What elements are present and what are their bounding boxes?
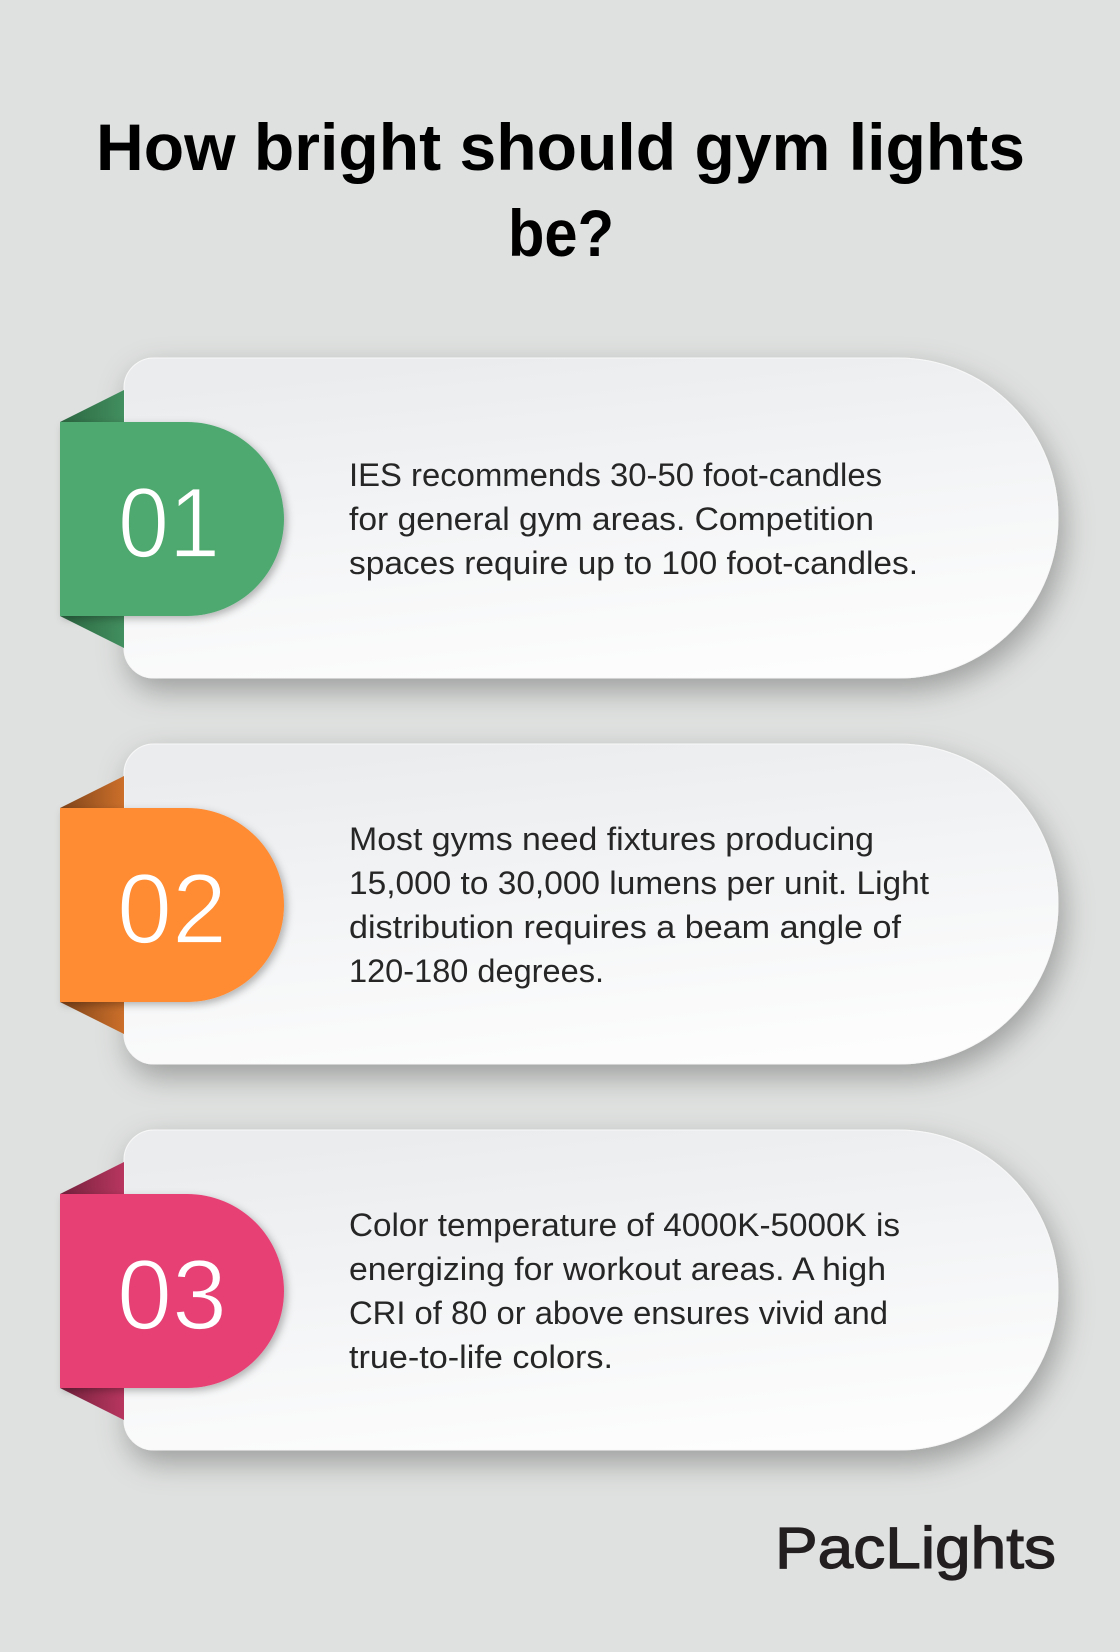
- text 02: 15,000 to 30,000 lumens per unit. Light: [349, 865, 929, 901]
- text 03: Color temperature of 4000K-5000K is: [349, 1207, 900, 1243]
- text 01: [349, 457, 918, 581]
- text 01: spaces require up to 100 foot-candles.: [349, 545, 918, 581]
- text 02: distribution requires a beam angle of: [349, 909, 901, 945]
- ribbon folds 01: [60, 390, 124, 648]
- number 01: 01: [118, 467, 220, 578]
- text 02: 120-180 degrees.: [349, 953, 604, 989]
- text 03: [349, 1207, 900, 1375]
- card 02: [124, 744, 1058, 1064]
- text 03: energizing for workout areas. A high: [349, 1251, 886, 1287]
- ribbon folds 03: [60, 1162, 124, 1420]
- title: be?: [508, 196, 614, 270]
- number 03: 03: [117, 1239, 227, 1350]
- text 01: IES recommends 30-50 foot-candles: [349, 457, 882, 493]
- text 01: for general gym areas. Competition: [349, 501, 874, 537]
- ribbon folds 02: [60, 776, 124, 1034]
- text 02: Most gyms need fixtures producing: [349, 821, 874, 857]
- text 03: true-to-life colors.: [349, 1339, 613, 1375]
- title: How bright should gym lights: [96, 110, 1025, 184]
- panel: step 01: [60, 358, 1058, 678]
- number badge 03: [60, 1194, 284, 1388]
- text 03: CRI of 80 or above ensures vivid and: [349, 1295, 888, 1331]
- panel: step 02: [60, 744, 1058, 1064]
- number badge 02: [60, 808, 284, 1002]
- number 02: 02: [117, 853, 227, 964]
- card 01: [124, 358, 1058, 678]
- panel: step 03: [60, 1130, 1058, 1450]
- card 03: [124, 1130, 1058, 1450]
- number badge 01: [60, 422, 284, 616]
- text 02: [349, 821, 929, 989]
- title: [96, 110, 1025, 270]
- logo: PacLights: PacLights: [775, 1516, 1056, 1581]
